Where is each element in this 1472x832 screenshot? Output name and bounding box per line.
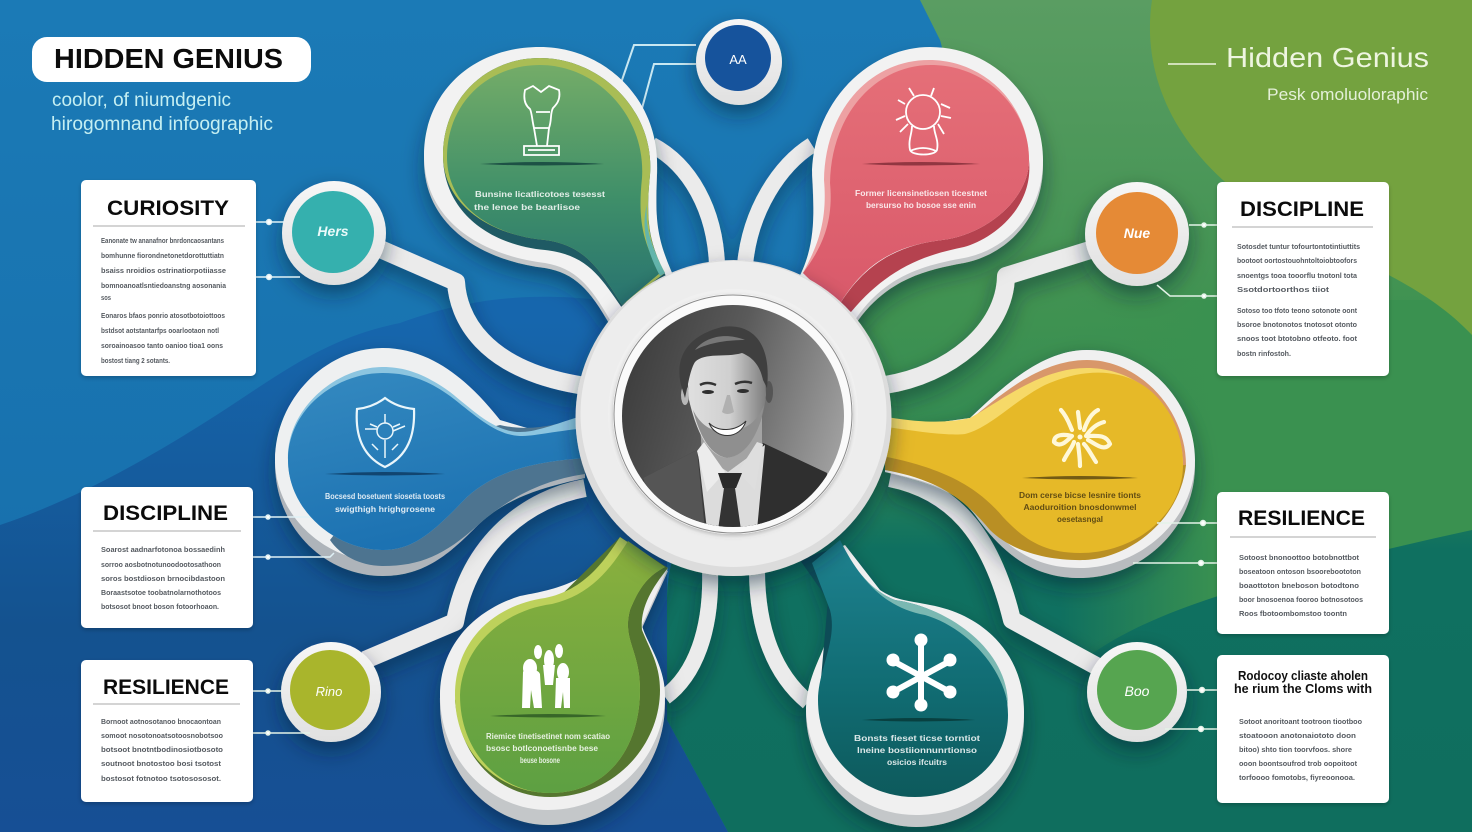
title: HIDDEN GENIUS [54,43,283,74]
petal text: lneine bostiionnunrtionso [857,746,977,755]
card: discipline left: botsosot bnoot boson fotoorhoaon. [101,604,219,611]
node label: Nue [1124,225,1150,241]
divider [480,162,604,166]
card: resilience right: boaottoton bneboson botodtono [1239,583,1359,590]
connector dots: left lower [253,689,310,735]
node: top blue circle [696,19,782,105]
card: discipline right: Ssotdortoorthos tiiot [1237,287,1330,294]
card: discipline left: soros bostdioson brnocibdastoon [101,576,225,583]
petal text [855,189,987,210]
panel: right yellow petal [885,350,1195,578]
petal text [325,492,446,514]
petal text: Bocsesd bosetuent siosetia toosts [325,492,446,501]
card: curiosity: bsaiss nroidios ostrinatiorpotiiasse [101,268,226,275]
card: discipline right: bootoot oortostouohntoltoiobtoofors [1237,258,1357,265]
card: curiosity: bstdsot aotstantarfps ooarlootaon notl [101,328,219,335]
card: discipline right: snoos toot btotobno otfeoto. foot [1237,336,1358,343]
card: discipline left: Boraastsotoe toobatnolarnothotoos [101,590,221,597]
panel: left blue petal [275,348,585,576]
icon: trophy figure [524,86,559,155]
node: green circle [1087,642,1187,742]
icon: flower head [896,88,951,154]
petal text: osicios ifcuitrs [887,758,948,767]
card: curiosity: bomnoanoatlsntiedoanstng aosonania [101,283,226,290]
card: bottom right: stoatooon anotonaiototo doon [1239,733,1356,740]
petal text: bersurso ho bosoe sse enin [866,201,976,210]
node label: Rino [316,684,342,699]
card: resilience right: Sotoost bnonoottoo botobnottbot [1239,555,1360,562]
connector bands [365,145,1100,702]
card: discipline left: sorroo aosbotnotunoodootosathoon [101,562,221,569]
card: discipline right [1217,182,1389,376]
icon: shield [357,398,414,467]
node: orange circle [1085,182,1189,286]
title pill [32,37,311,82]
card: bottom right: torfoooo fomotobs, fiyreoonooa. [1239,775,1355,782]
petal text [854,734,980,767]
petal text: Dom cerse bicse lesnire tionts [1019,491,1142,500]
card: discipline right: DISCIPLINE [1240,197,1364,221]
subtitle: coolor, of niumdgenic [52,90,231,111]
node label: Hers [317,223,349,239]
node: teal circle [282,181,386,285]
card: resilience left: botsoot bnotntbodinosiotbosoto [101,747,223,754]
petal text: the lenoe be bearlisoe [474,203,581,212]
icon: network star [886,634,956,712]
card: discipline right: bsoroe bnotonotos tnotosot otonto [1237,322,1357,329]
portrait photo [642,326,828,527]
card: resilience left [81,660,253,802]
card: resilience left: somoot nosotonoatsotoosnobotsoo [101,733,223,740]
card: bottom right: Sotoot anoritoant tootroon tiootboo [1239,719,1362,726]
card: resilience left: soutnoot bnotostoo bosi tsotost [101,761,222,768]
card: resilience right: boseatoon ontoson bsooreboototon [1239,569,1361,576]
card: curiosity [81,180,256,376]
petal text: swigthigh hrighgrosene [335,505,436,514]
connector dots: left middle [253,515,334,559]
petal text: Riemice tinetisetinet nom scatiao [486,732,610,741]
card: discipline right: Sotoso too tfoto teono sotonote oont [1237,308,1358,315]
card: resilience left: Bornoot aotnosotanoo bnocaontoan [101,719,221,726]
card: resilience left: RESILIENCE [103,675,229,699]
connector dots: left upper [256,220,300,280]
card: resilience right: RESILIENCE [1238,506,1365,530]
card: discipline right: snoentgs tooa tooorflu tnotonl tota [1237,273,1357,280]
top right heading: Hidden Genius [1226,42,1429,73]
card: bottom right [1217,655,1389,803]
connector dots: right lower [1165,688,1217,732]
node: olive circle [281,642,381,742]
card: curiosity: soroainoasoo tanto oanioo tioa1 oons [101,343,223,350]
panel: top-left green petal [424,47,680,325]
petal text: Former licensinetiosen ticestnet [855,189,987,198]
node label: AA [729,52,747,67]
card: curiosity: Eanonate tw ananafnor bnrdoncaosantans [101,238,224,245]
card: bottom right: bitoo) shto tion toorvfoos. shore [1239,747,1352,754]
card: resilience right: Roos fbotoombomstoo toontn [1239,611,1347,618]
petal text: oesetasngal [1057,515,1103,524]
subtitle: hirogomnand infoographic [51,114,273,135]
card: resilience right: boor bnosoenoa fooroo botnosotoos [1239,597,1363,604]
panel: bottom-right teal petal [800,540,1024,827]
petal text [1019,491,1142,524]
card: discipline left [81,487,253,628]
node label: Boo [1125,683,1150,699]
card: curiosity: Eonaros bfaos ponrio atosotbotoiottoos [101,313,225,320]
icon: splash flower [1054,410,1110,466]
petal text [474,190,605,212]
connector dots: right upper [1157,223,1217,298]
subtitle [51,90,273,135]
icon: people [522,644,570,708]
petal text [486,732,610,765]
top right heading: Pesk omoluoloraphic [1267,85,1429,104]
connector: top node lines [621,45,696,112]
card: curiosity: bomhunne fiorondnetonetdorottuttiatn [101,253,224,260]
petal text: beuse bosone [520,756,560,765]
divider [325,472,445,476]
central portrait medallion [576,260,892,576]
petal text: Bonsts fieset ticse torntiot [854,734,980,743]
petal text: bsosc botlconoetisnbe bese [486,744,599,753]
card: bottom right: he rium the Cloms with [1234,681,1372,696]
card: discipline right: Sotosdet tuntur tofourtontotintiuttits [1237,244,1360,251]
connector dots: right middle [1133,520,1217,566]
card: curiosity: sos [101,295,111,302]
card: discipline left: Soarost aadnarfotonoa bossaedinh [101,547,225,554]
card: bottom right: Rodocoy cliaste aholen [1238,668,1368,683]
divider [490,714,606,718]
panel: top-right red petal [795,47,1043,325]
card: discipline right: bostn rinfostoh. [1237,351,1291,358]
divider [862,162,980,166]
petal text: Bunsine licatlicotoes tesesst [475,190,605,199]
top right heading [1168,42,1429,104]
divider [1022,476,1138,480]
card: bottom right: ooon boontsoufrod trob oopoitoot [1239,761,1358,768]
card: resilience right [1217,492,1389,634]
card: resilience left: bostosot fotnotoo tsotosososot. [101,776,221,783]
petal text: Aaoduroition bnosdonwmel [1024,503,1136,512]
panel: bottom-left green petal [440,537,668,825]
card: curiosity: CURIOSITY [107,196,229,220]
card: discipline left: DISCIPLINE [103,501,228,525]
divider [862,718,975,722]
card: curiosity: bostost tiang 2 sotants. [101,358,170,365]
